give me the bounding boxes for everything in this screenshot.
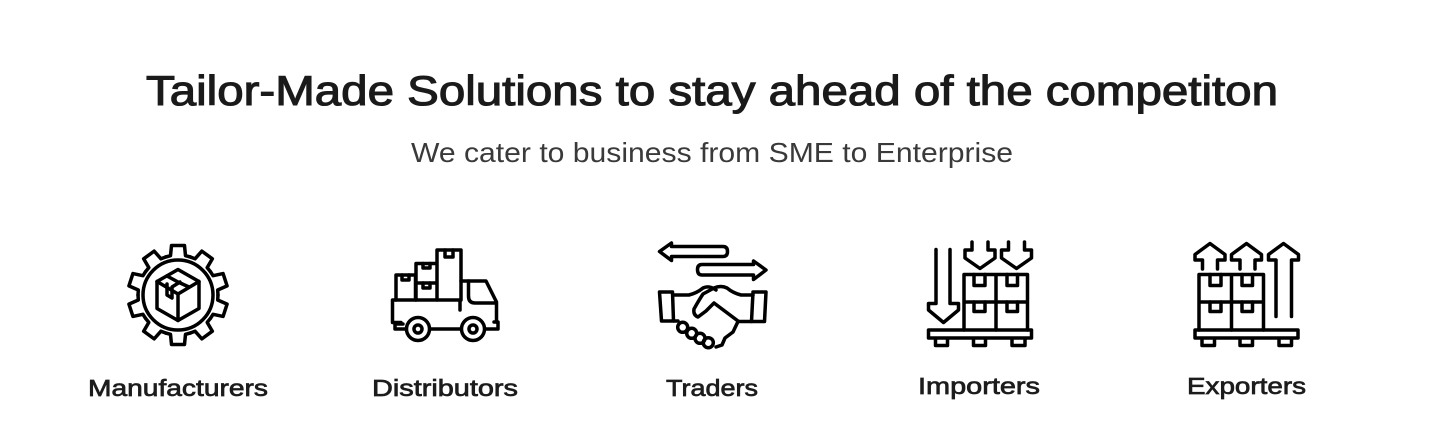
label: Exporters: Exporters xyxy=(1187,373,1306,399)
icon: handshake with exchange arrows (Traders) xyxy=(660,243,766,348)
title: Tailor-Made Solutions to stay ahead of the competiton xyxy=(146,67,1278,114)
icon: pallet with incoming arrows (Importers) xyxy=(928,242,1032,346)
icon: delivery truck with boxes (Distributors) xyxy=(392,250,498,340)
label: Distributors: Distributors xyxy=(372,375,518,401)
label: Traders: Traders xyxy=(666,375,758,401)
label: Importers: Importers xyxy=(918,373,1040,399)
subtitle: We cater to business from SME to Enterprise xyxy=(411,137,1013,168)
label: Manufacturers: Manufacturers xyxy=(88,375,268,401)
icon: gear with box (Manufacturers) xyxy=(127,246,229,344)
icon: pallet with outgoing arrows (Exporters) xyxy=(1195,244,1298,346)
